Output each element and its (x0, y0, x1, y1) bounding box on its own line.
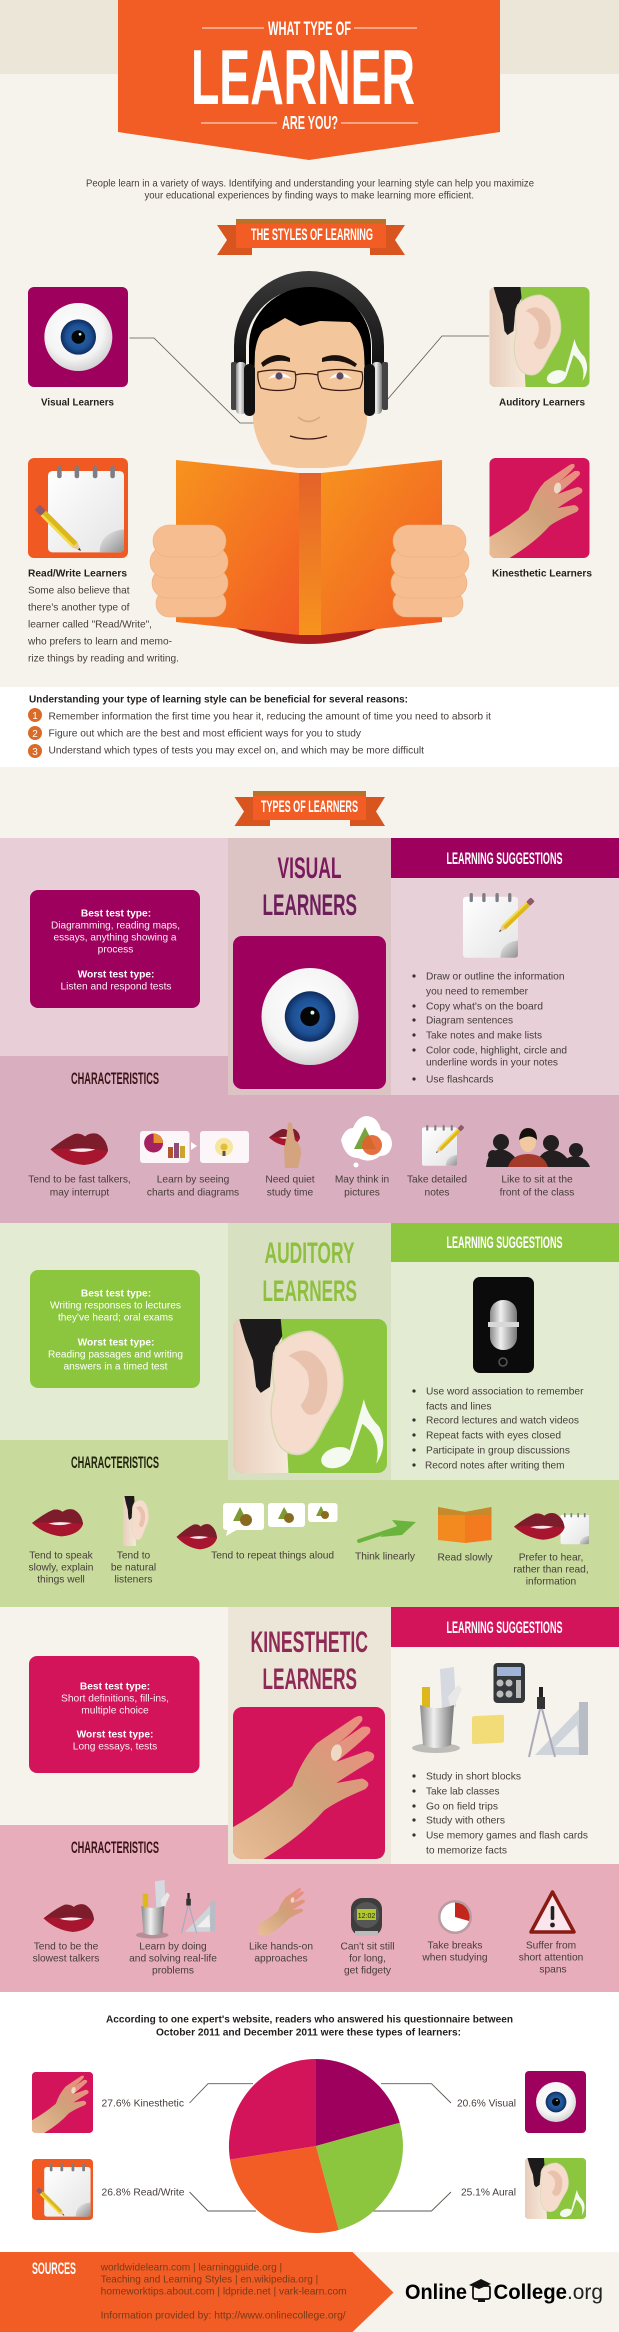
headphone cups (231, 362, 237, 410)
glasses (258, 370, 363, 390)
trait: quiet study time: Need quiet (265, 1174, 315, 1186)
book pages (176, 457, 442, 476)
panel: survey results (0, 1992, 619, 2252)
icon: monitor with cap (469, 2279, 491, 2302)
book covers (176, 460, 299, 635)
visual characteristics heading: CHARACTERISTICS (71, 1070, 159, 1088)
trait: prefer to hear (513, 1513, 589, 1588)
auditory test types card: Best test type: (81, 1288, 151, 1300)
top band (0, 0, 619, 74)
visual suggestions list: you need to remember (426, 986, 529, 998)
leader lines (190, 2084, 451, 2211)
trait: fast talkers: Tend to be fast talkers, (28, 1174, 131, 1186)
panel: visual learners (0, 838, 619, 1223)
footer: sources: homeworktips.about.com | ldpride.net | vark-learn.com (101, 2286, 347, 2298)
read/write text block: there's another type of (28, 602, 130, 614)
visual suggestions list: Take notes and make lists (426, 1030, 542, 1042)
kinesthetic large hand tile (233, 1707, 385, 1859)
read/write text block: Read/Write Learners (28, 568, 127, 580)
trait: slowest talkers: slowest talkers (33, 1954, 99, 1964)
read/write text block: Some also believe that (28, 586, 130, 596)
title: learner: LEARNER (191, 33, 415, 121)
logo: online college: College (494, 2281, 567, 2304)
trait: learn by doing: Learn by doing (139, 1942, 207, 1952)
trait: natural listeners: be natural (111, 1562, 156, 1574)
trait: fidgety (340, 1898, 395, 1976)
trait: front of the class: Like to sit at the (501, 1174, 573, 1186)
visual test types card: Listen and respond tests (60, 982, 172, 992)
auditory suggestions list: Record notes after writing them (425, 1460, 564, 1472)
trait: charts and diagrams: Learn by seeing (157, 1174, 230, 1186)
tile: kinesthetic learners (490, 458, 590, 558)
visual test types card: Best test type: (81, 908, 151, 920)
kinesthetic suggestions list: to memorize facts (426, 1846, 507, 1856)
visual heading: VISUAL (278, 852, 342, 885)
trait: slowest talkers: Tend to be the (34, 1942, 99, 1952)
trait: think in pictures: pictures (344, 1188, 380, 1198)
auditory test types card: answers in a timed test (64, 1362, 168, 1372)
pie chart (229, 2059, 403, 2233)
trait: fast talkers: may interrupt (50, 1188, 109, 1198)
trait: read slowly: Read slowly (438, 1552, 493, 1564)
trait: think in pictures: May think in (335, 1174, 389, 1186)
right hand (391, 525, 469, 617)
auditory suggestions list (412, 1386, 584, 1472)
connector lines to central figure (130, 336, 489, 423)
trait: charts and diagrams (140, 1131, 249, 1198)
central figure: student reading (150, 271, 469, 644)
kinesthetic test types card: Best test type: (80, 1682, 150, 1692)
trait: prefer to hear: rather than read, (513, 1564, 589, 1576)
shirt (235, 620, 379, 644)
title: are you: ARE YOU? (282, 113, 338, 133)
trait: detailed notes (407, 1125, 467, 1198)
trait: front of the class (486, 1128, 590, 1198)
kinesthetic test types card: multiple choice (81, 1706, 149, 1716)
tile: auditory learners (490, 287, 590, 387)
visual suggestions list: underline words in your notes (426, 1058, 558, 1068)
title banner (118, 0, 500, 160)
auditory heading (262, 1237, 357, 1308)
kinesthetic suggestions list: Study in short blocks (426, 1772, 521, 1782)
footer: sources: Information provided by: http://www.onlinecollege.org/ (101, 2310, 346, 2322)
tile: aural share: 25.1% Aural (461, 2188, 516, 2198)
trait: fidgety: 12:02 (358, 1913, 375, 1920)
auditory characteristics heading: CHARACTERISTICS (71, 1454, 159, 1472)
trait: speak slowly (29, 1509, 94, 1586)
headphones band (234, 271, 384, 368)
auditory suggestions list: facts and lines (426, 1402, 492, 1412)
trait: fidgety: get fidgety (344, 1966, 392, 1976)
visual suggestions list: Draw or outline the information (426, 972, 564, 982)
survey intro text: October 2011 and December 2011 were these types of learners: (156, 2028, 461, 2038)
left hand (150, 525, 228, 617)
trait: hands-on: approaches (254, 1954, 308, 1964)
kinesthetic test types card: Worst test type: (77, 1730, 153, 1740)
intro text: your educational experiences by finding ways to make learning more efficient. (144, 190, 474, 202)
visual suggestions list: Use flashcards (426, 1074, 494, 1086)
reason 1: 1 (32, 711, 38, 722)
auditory suggestions list: Record lectures and watch videos (426, 1416, 579, 1426)
footer: sources: Teaching and Learning Styles | en.wikipedia.org | (101, 2274, 318, 2286)
trait: front of the class: front of the class (500, 1188, 574, 1198)
trait: hands-on (249, 1888, 313, 1964)
trait: fast talkers (28, 1133, 131, 1198)
auditory test types card (30, 1270, 200, 1388)
trait: speak slowly: things well (37, 1574, 85, 1586)
panel: kinesthetic learners (0, 1607, 619, 1992)
auditory suggestions list: Use word association to remember (426, 1386, 584, 1398)
read/write text block: learner called "Read/Write", (28, 620, 152, 630)
trait: learn by doing: problems (152, 1966, 194, 1976)
visual test types card (30, 890, 200, 1008)
ribbon: types of learners: TYPES OF LEARNERS (261, 798, 358, 816)
trait: read slowly (438, 1507, 493, 1564)
trait: natural listeners: Tend to (117, 1550, 151, 1562)
visual heading: LEARNERS (262, 889, 357, 922)
trait: speak slowly: slowly, explain (29, 1562, 93, 1574)
tile: read/write share (32, 2159, 185, 2220)
trait: detailed notes: Take detailed (407, 1174, 467, 1186)
trait: detailed notes: notes (425, 1188, 449, 1198)
eyebrows (261, 355, 357, 367)
kinesthetic suggestions list (412, 1772, 588, 1856)
trait: attention spans: spans (539, 1964, 567, 1976)
read/write text block: rize things by reading and writing. (28, 654, 179, 664)
kinesthetic heading (250, 1626, 368, 1696)
trait: think linearly: Think linearly (355, 1552, 416, 1562)
ribbon: types of learners (234, 791, 385, 826)
trait: learn by doing: and solving real-life (129, 1954, 217, 1964)
trait: takes breaks: when studying (421, 1952, 488, 1964)
trait: think linearly (355, 1520, 416, 1562)
tile: visual learners (28, 287, 128, 387)
auditory suggestions header (391, 1223, 619, 1262)
hair (249, 287, 371, 370)
kinesthetic suggestions list: Study with others (426, 1816, 505, 1826)
trait: takes breaks: Take breaks (428, 1940, 482, 1952)
kinesthetic characteristics heading: CHARACTERISTICS (71, 1839, 159, 1857)
trait: fidgety: Can't sit still (340, 1942, 395, 1952)
visual large eye tile (233, 936, 386, 1089)
logo: online college: Online (405, 2281, 467, 2304)
eyes (268, 373, 352, 379)
label: kinesthetic learners: Kinesthetic Learners (492, 568, 592, 580)
tile: read/write learners (28, 458, 128, 558)
visual suggestions list: Color code, highlight, circle and (426, 1046, 567, 1056)
auditory suggestions list: Repeat facts with eyes closed (426, 1430, 561, 1442)
panel: reasons (0, 687, 619, 767)
kinesthetic test types card: Short definitions, fill-ins, (61, 1694, 169, 1704)
auditory suggestions list: Participate in group discussions (426, 1446, 570, 1456)
icon: stationery set (412, 1663, 588, 1757)
auditory test types card: Worst test type: (78, 1338, 154, 1348)
reason 2: 2 (32, 729, 38, 740)
trait: takes breaks (421, 1900, 488, 1964)
footer: sources (0, 2252, 394, 2332)
reason 1: Remember information the first time you hear it, reducing the amount of time you need to absorb it (48, 712, 491, 722)
visual suggestions header (391, 838, 619, 878)
kinesthetic suggestions header (391, 1607, 619, 1647)
icon: notepad and pencil (463, 893, 535, 958)
ribbon: the styles of learning: THE STYLES OF LEARNING (251, 226, 373, 244)
logo: online college: .org (567, 2281, 603, 2304)
tile: kinesthetic share (32, 2072, 184, 2133)
reason 2: Figure out which are the best and most efficient ways for you to study (48, 728, 362, 740)
auditory test types card: they've heard; oral exams (58, 1312, 173, 1324)
label: visual learners: Visual Learners (41, 398, 114, 408)
title: what type of: WHAT TYPE OF (268, 19, 351, 40)
kinesthetic suggestions list: Take lab classes (426, 1786, 500, 1798)
trait: attention spans: short attention (519, 1952, 583, 1964)
footer: sources: SOURCES (32, 2260, 76, 2278)
kinesthetic suggestions list: Use memory games and flash cards (426, 1830, 588, 1842)
kinesthetic suggestions list: Go on field trips (426, 1802, 498, 1812)
visual test types card: essays, anything showing a (54, 932, 177, 944)
trait: quiet study time (265, 1122, 315, 1198)
trait: prefer to hear: information (526, 1576, 576, 1588)
nose (298, 417, 320, 422)
trait: learn by doing (129, 1880, 217, 1976)
trait: prefer to hear: Prefer to hear, (519, 1552, 583, 1564)
survey intro text: According to one expert's website, readers who answered his questionnaire between (106, 2014, 513, 2026)
trait: repeat things aloud (176, 1503, 338, 1562)
mouth (290, 436, 327, 439)
trait: hands-on: Like hands-on (249, 1942, 313, 1952)
reason 3: Understand which types of tests you may excel on, and which may be more difficult (48, 746, 424, 756)
kinesthetic test types card: Long essays, tests (73, 1742, 157, 1752)
tile: read/write share: 26.8% Read/Write (102, 2188, 185, 2198)
tile: visual share: 20.6% Visual (457, 2098, 516, 2110)
visual suggestions list (412, 972, 567, 1086)
trait: charts and diagrams: charts and diagrams (147, 1188, 239, 1198)
trait: attention spans (519, 1892, 583, 1976)
trait: natural listeners (111, 1496, 156, 1586)
trait: slowest talkers (33, 1904, 99, 1964)
tile: aural share (461, 2158, 586, 2219)
visual test types card: Worst test type: (78, 970, 154, 980)
read/write text block (27, 568, 179, 664)
face (253, 318, 367, 468)
kinesthetic heading: KINESTHETIC (250, 1626, 368, 1659)
footer: sources: worldwidelearn.com | learningguide.org | (100, 2262, 282, 2274)
trait: natural listeners: listeners (115, 1574, 152, 1586)
auditory heading: AUDITORY (264, 1237, 354, 1270)
label: auditory learners: Auditory Learners (499, 398, 585, 408)
auditory heading: LEARNERS (262, 1275, 357, 1308)
trait: fidgety: for long, (349, 1954, 386, 1964)
visual test types card: Diagramming, reading maps, (51, 920, 180, 932)
tile: kinesthetic share: 27.6% Kinesthetic (102, 2098, 184, 2110)
auditory test types card: Writing responses to lectures (50, 1300, 181, 1312)
survey intro text (106, 2014, 513, 2038)
auditory test types card: Reading passages and writing (48, 1350, 183, 1360)
visual heading (262, 852, 357, 922)
ribbon: the styles of learning (217, 219, 405, 255)
panel: reasons: Understanding your type of learning style can be beneficial for several reasons: (29, 694, 408, 706)
kinesthetic heading: LEARNERS (262, 1663, 357, 1696)
tile: visual share (457, 2071, 586, 2133)
trait: think in pictures (335, 1116, 392, 1198)
intro text: People learn in a variety of ways. Identifying and understanding your learning style can help you maximize (86, 178, 534, 190)
trait: repeat things aloud: Tend to repeat things aloud (211, 1550, 334, 1562)
icon: phone with microphone (473, 1277, 534, 1373)
intro text (86, 178, 534, 202)
visual suggestions list: Diagram sentences (426, 1016, 513, 1026)
kinesthetic test types card (29, 1656, 200, 1773)
panel: auditory learners (0, 1223, 619, 1607)
reason 3: 3 (32, 747, 38, 758)
read/write text block: who prefers to learn and memo- (27, 636, 172, 648)
logo: online college (405, 2279, 603, 2304)
visual test types card: process (98, 944, 133, 956)
visual suggestions list: Copy what's on the board (426, 1002, 543, 1012)
trait: attention spans: Suffer from (526, 1940, 576, 1952)
trait: speak slowly: Tend to speak (29, 1550, 94, 1562)
auditory large ear tile (233, 1319, 387, 1473)
trait: quiet study time: study time (267, 1188, 314, 1198)
